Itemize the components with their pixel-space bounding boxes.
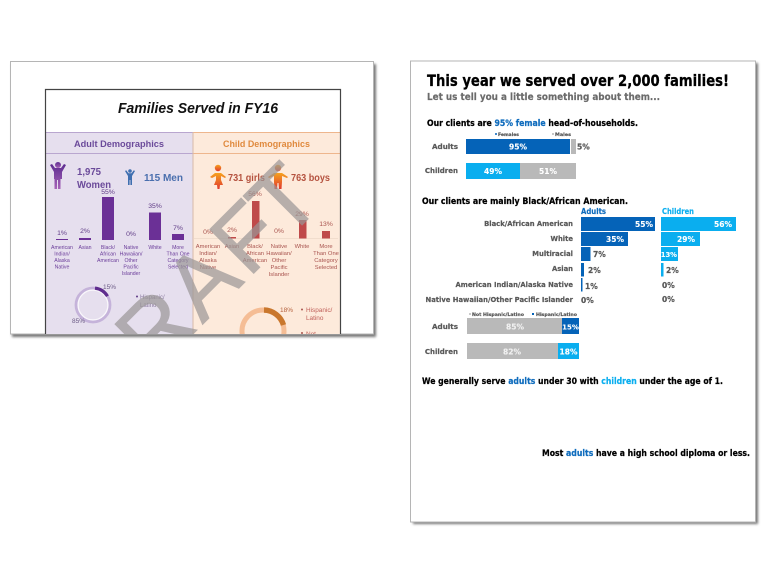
stat: 731 girls: 731 girls — [228, 173, 265, 184]
bar chart: child race: Islander — [269, 272, 289, 278]
stat: 1,975 women — [77, 167, 111, 191]
bar chart: children race: 56% — [714, 220, 732, 229]
bar chart: child race: Asian — [225, 244, 239, 250]
donut chart: child Hispanic/Latino: 18% — [280, 307, 293, 314]
title: Families Served in FY16 — [118, 100, 279, 117]
bar chart: adults race — [581, 207, 655, 305]
bar chart: race category labels: Asian — [552, 265, 573, 273]
stacked bars: Hispanic/Latino: 85% — [506, 322, 524, 332]
bar chart: child race: Other — [272, 258, 286, 264]
bar chart: adult race: White — [148, 245, 162, 251]
stacked bars: Hispanic/Latino: Children — [425, 348, 458, 356]
bar chart: child race: 0% — [274, 228, 284, 235]
stacked bars: Hispanic/Latino: Not Hispanic/Latino — [472, 312, 524, 318]
bar chart: race category labels: American Indian/Alaska Native — [455, 281, 573, 289]
stacked bars: Hispanic/Latino: 15% — [562, 324, 579, 332]
stat: 763 boys: 763 boys — [291, 173, 330, 184]
bar chart: adult race: American — [97, 258, 119, 264]
bar chart: adult race: Hawaiian/ — [120, 252, 143, 258]
donut chart: adult Hispanic/Latino: Latino — [140, 303, 157, 309]
bar chart: race category labels: White — [550, 235, 573, 243]
stacked bars: gender: 95% — [509, 142, 527, 152]
donut chart: child Hispanic/Latino: Not — [306, 331, 316, 338]
donut chart: child Hispanic/Latino: Latino — [306, 315, 324, 322]
stacked bars: Hispanic/Latino: 82% — [503, 348, 521, 356]
bar chart: adult race: Pacific — [123, 264, 139, 270]
bar chart: child race: Native — [200, 265, 216, 271]
bar chart: child race: American — [196, 244, 220, 250]
icon: boy — [268, 165, 288, 189]
heading: adult demographics: Adult Demographics — [74, 139, 164, 150]
watermark: DRAFT: DRAFT — [51, 146, 339, 433]
bar chart: child race — [194, 191, 339, 278]
stacked bars: Hispanic/Latino: 18% — [560, 348, 578, 356]
stacked bars: gender — [425, 132, 590, 179]
bar chart: adults race: 0% — [581, 296, 594, 305]
bar chart: child race: Indian/ — [199, 251, 217, 257]
stacked bars: Hispanic/Latino — [425, 312, 579, 359]
bar chart: race category labels: Black/African American — [484, 220, 573, 228]
bar chart: adult race: African — [100, 252, 116, 258]
bar chart: race category labels: Multiracial — [532, 250, 573, 258]
subtitle: Let us tell you a little something about them... — [427, 92, 660, 103]
bar chart: adult race: 55% — [101, 189, 115, 196]
stat: 1,975 women: 1,975 — [77, 167, 101, 178]
stacked bars: gender: Adults — [432, 142, 458, 151]
bar chart: child race: White — [295, 244, 309, 250]
bar chart: adult race: 1% — [57, 230, 67, 237]
panel: right page, family statistics — [410, 61, 758, 524]
bar chart: adult race: Asian — [79, 245, 92, 251]
stacked bars: gender: Children — [425, 167, 458, 175]
bar chart: adults race: 35% — [606, 235, 624, 244]
bar chart: adult race — [51, 189, 190, 277]
bar chart: adults race: 55% — [635, 220, 653, 229]
bar chart: adult race: American — [51, 245, 73, 251]
bar chart: child race: Pacific — [270, 265, 288, 271]
bar chart: adult race: Indian/ — [54, 252, 70, 258]
bar chart: adult race: Native — [124, 245, 138, 251]
stat: 115 men: 115 Men — [144, 173, 183, 184]
stacked bars: gender: Males — [555, 132, 571, 138]
bar chart: child race: Native — [271, 244, 287, 250]
bar chart: children race: 0% — [662, 281, 675, 290]
donut chart: adult Hispanic/Latino — [72, 284, 165, 325]
bar chart: adult race: Selected — [168, 264, 188, 270]
bar chart: child race: 2% — [227, 227, 237, 234]
donut chart: adult Hispanic/Latino: 85% — [72, 318, 85, 325]
outer frame — [46, 90, 340, 334]
bar chart: adults race: 7% — [593, 250, 606, 259]
bar chart: child race: African — [246, 251, 264, 257]
stacked bars: Hispanic/Latino: Adults — [432, 322, 458, 331]
bar chart: child race: 13% — [319, 221, 333, 228]
bar chart: children race: 0% — [662, 295, 675, 304]
stacked bars: gender: 49% — [484, 167, 502, 176]
bar chart: children race: 2% — [666, 266, 679, 275]
bar chart: child race: More — [319, 244, 333, 250]
bar chart: race category labels — [426, 220, 574, 304]
icon: man — [125, 169, 135, 185]
bar chart: adults race: Adults — [581, 207, 606, 216]
stacked bars: gender: 51% — [539, 167, 557, 176]
bar chart: children race: 13% — [661, 251, 677, 259]
stacked bars: gender: 5% — [577, 142, 590, 152]
panel: child demographics background — [193, 132, 341, 334]
bar chart: child race: Category — [314, 258, 338, 264]
stacked bars: Hispanic/Latino: Hispanic/Latino — [536, 312, 577, 318]
bar chart: child race: Black/ — [247, 244, 263, 250]
bar chart: child race: Hawaiian/ — [266, 251, 292, 257]
bar chart: child race: 0% — [203, 229, 213, 236]
bar chart: adult race: Native — [55, 264, 69, 270]
stacked bars: gender: Females — [498, 132, 519, 138]
bar chart: child race: Selected — [315, 265, 337, 271]
bar chart: adult race: Alaska — [54, 258, 70, 264]
bar chart: adults race: 1% — [585, 282, 598, 291]
bar chart: race category labels: Native Hawaiian/Other Pacific Islander — [426, 296, 574, 304]
bar chart: child race: Alaska — [199, 258, 217, 264]
donut chart: adult Hispanic/Latino: Hispanic/ — [140, 295, 165, 301]
donut chart: child Hispanic/Latino — [240, 307, 332, 334]
heading: 95% female: Our clients are 95% female head-of-households. — [427, 119, 638, 129]
bar chart: adult race: Than One — [166, 252, 190, 258]
icon: girl — [210, 165, 226, 189]
heading: mainly Black/African American: Our clients are mainly Black/African American. — [422, 197, 628, 207]
bar chart: child race: 29% — [295, 211, 309, 218]
bar chart: adult race: Islander — [122, 271, 140, 277]
bar chart: adult race: Category — [167, 258, 189, 264]
donut chart: adult Hispanic/Latino: 15% — [103, 284, 116, 291]
bar chart: children race — [661, 207, 736, 304]
stat: 1,975 women: Women — [77, 180, 111, 191]
icon: woman — [50, 162, 66, 189]
bar chart: child race: 56% — [248, 191, 262, 198]
bar chart: adult race: 35% — [148, 203, 162, 210]
bar chart: adults race: 2% — [588, 266, 601, 275]
heading: adults under 30: We generally serve adults under 30 with children under the age of 1. — [422, 377, 723, 387]
donut chart: child Hispanic/Latino: Hispanic/ — [306, 307, 333, 314]
bar chart: adult race: 0% — [126, 231, 136, 238]
panel: left slide, Families Served in FY16 — [10, 61, 378, 339]
bar chart: child race: American — [243, 258, 267, 264]
bar chart: adult race: Other — [125, 258, 138, 264]
bar chart: children race: 29% — [677, 235, 695, 244]
heading: child demographics: Child Demographics — [223, 139, 310, 150]
bar chart: adult race: 7% — [173, 225, 183, 232]
bar chart: child race: Than One — [313, 251, 339, 257]
bar chart: adult race: More — [172, 245, 184, 251]
bar chart: adult race: Black/ — [101, 245, 116, 251]
bar chart: children race: Children — [662, 207, 694, 216]
panel: adult demographics background — [45, 132, 193, 334]
bar chart: adult race: 2% — [80, 228, 90, 235]
